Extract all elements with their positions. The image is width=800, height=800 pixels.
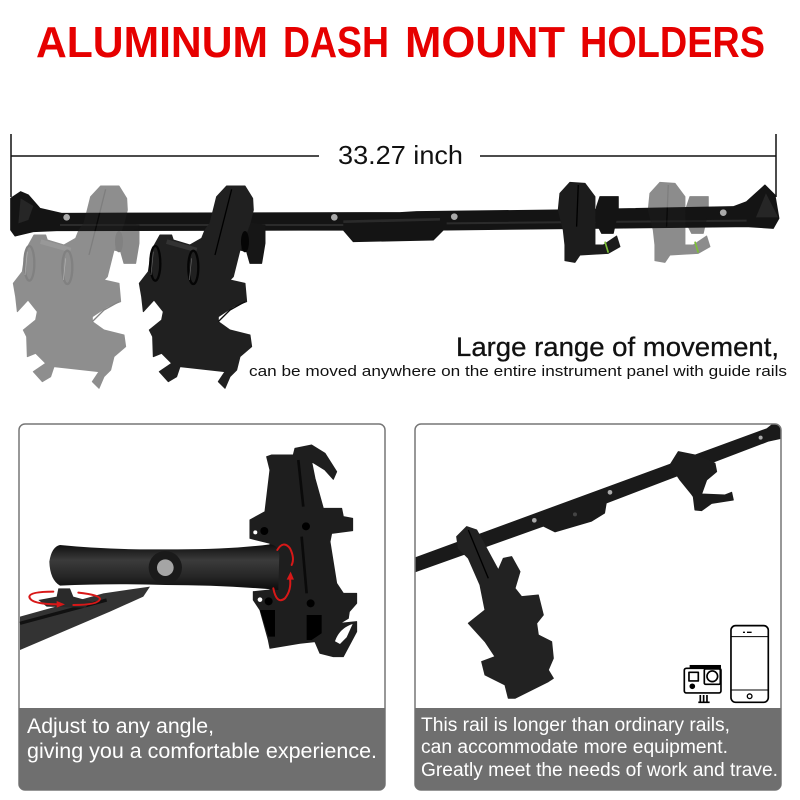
title: HOLDERS (580, 19, 765, 67)
caption bar: giving you a comfortable experience. (27, 740, 377, 763)
title (36, 19, 765, 67)
rotation arrows (29, 545, 293, 605)
product photo: rail with holders (11, 182, 779, 388)
mount base (38, 588, 92, 608)
caption bar: This rail is longer than ordinary rails, (421, 715, 730, 736)
rail (11, 185, 779, 242)
dimension line: 33.27 inch: 33.27 inch (338, 140, 463, 170)
title: DASH (283, 19, 389, 67)
faded camera mount (648, 182, 710, 262)
panel: longer rail (415, 424, 783, 790)
phone holder (139, 186, 265, 388)
title: MOUNT (405, 19, 565, 67)
movement caption (249, 332, 787, 380)
title: ALUMINUM (36, 19, 268, 67)
pivot bolt (148, 552, 182, 578)
photo: angled rail (415, 424, 783, 702)
caption bar (415, 708, 781, 790)
screws (63, 209, 727, 221)
icon: phone (731, 626, 768, 702)
arm (49, 544, 279, 590)
caption bar: Greatly meet the needs of work and trave. (421, 760, 778, 781)
icon: action camera (684, 665, 721, 702)
holder (250, 445, 357, 657)
caption bar (19, 708, 385, 790)
green ring (605, 242, 698, 253)
photo: holder close-up (20, 445, 357, 657)
dimension line: 33.27 inch (10, 134, 776, 197)
movement caption: can be moved anywhere on the entire instrument panel with guide rails (249, 363, 787, 380)
caption bar: can accommodate more equipment. (421, 737, 728, 758)
caption bar: Adjust to any angle, (27, 715, 214, 738)
camera mount (558, 182, 620, 262)
faded holder position (13, 186, 139, 388)
movement caption: Large range of movement, (456, 332, 779, 362)
panel: adjust angle (19, 424, 385, 790)
